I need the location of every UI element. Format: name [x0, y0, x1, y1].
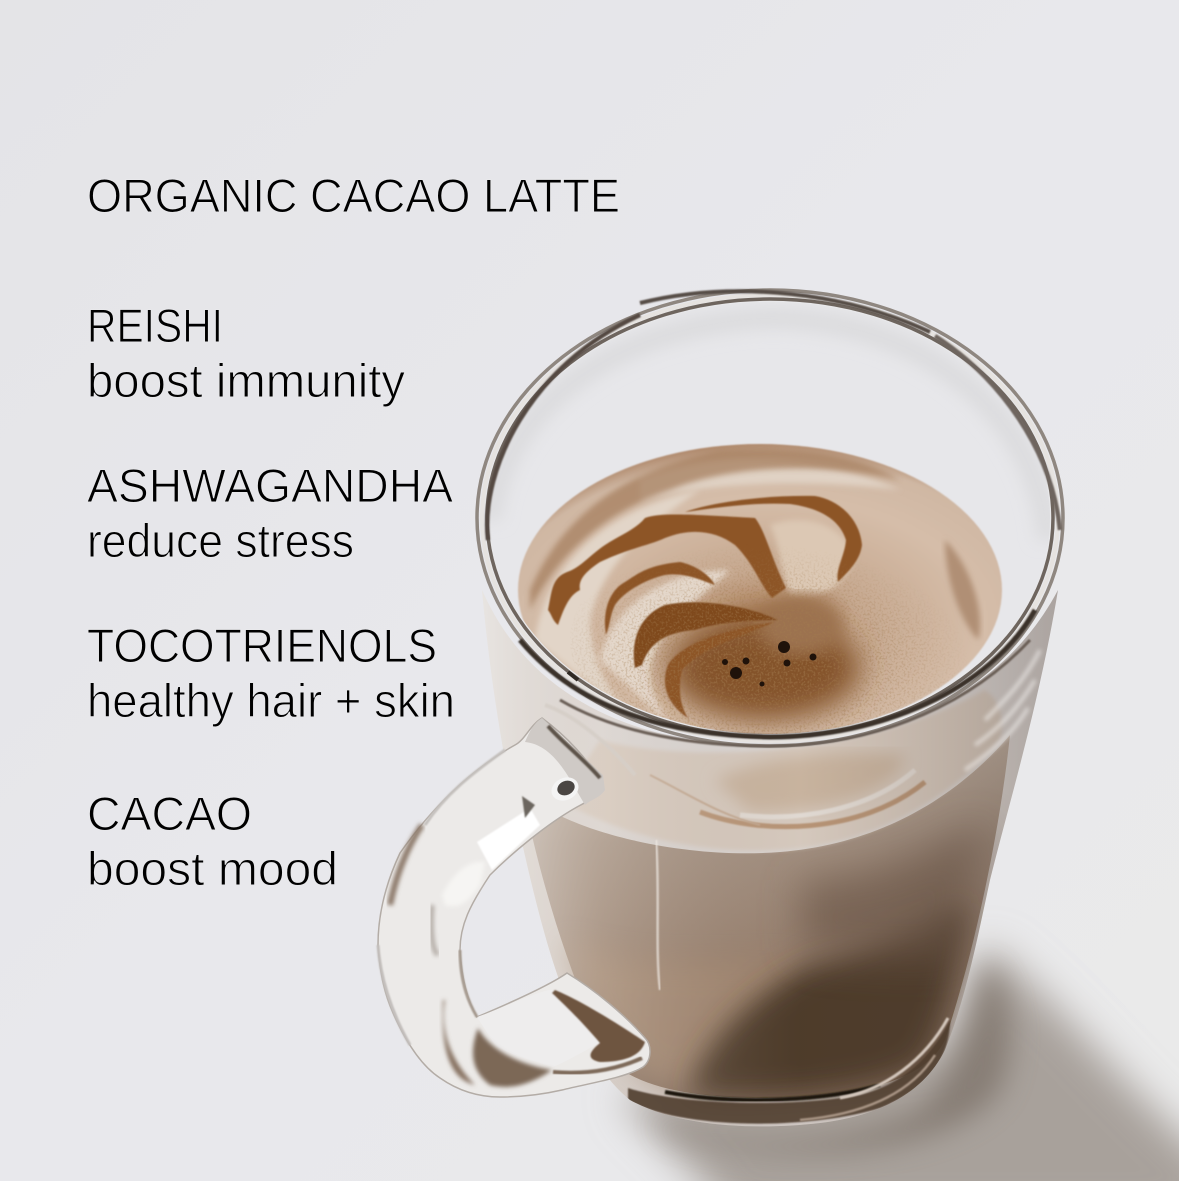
ingredient: reishi: boost immunity	[87, 354, 405, 407]
handle white highlight	[477, 808, 540, 870]
seam highlight	[656, 840, 660, 990]
dark lower liquid	[690, 900, 965, 1097]
back inner glass	[480, 290, 1070, 750]
brown reflection in handle base	[552, 990, 645, 1062]
rim dark accents	[487, 291, 1060, 746]
ingredient: ashwagandha: ASHWAGANDHA	[87, 459, 454, 512]
text list	[87, 169, 620, 895]
ingredient: reishi	[87, 299, 405, 407]
mug cast shadow	[620, 945, 1179, 1181]
handle	[378, 705, 650, 1097]
liquid	[522, 735, 1010, 1098]
thin upper arc	[685, 496, 862, 582]
ingredient: reishi: REISHI	[87, 299, 223, 352]
ingredient: ashwagandha: reduce stress	[87, 514, 354, 567]
coffee surface	[518, 444, 1002, 736]
handle smudges	[390, 825, 422, 905]
window under handle	[477, 990, 600, 1067]
upper brown edge band	[530, 449, 900, 610]
handle glass fill	[378, 718, 650, 1097]
pale foam patches	[534, 492, 696, 699]
glass mug	[378, 290, 1070, 1140]
ingredient: tocotrienols: healthy hair + skin	[87, 674, 455, 727]
lower inner arc	[665, 622, 775, 718]
glass rim	[477, 290, 1063, 746]
mug interior	[482, 294, 1058, 742]
lower wide arc	[634, 602, 778, 668]
handle joint	[525, 718, 605, 805]
ingredient: tocotrienols: TOCOTRIENOLS	[87, 619, 437, 672]
caramel swirl shapes	[548, 496, 862, 718]
ingredient: cacao: boost mood	[87, 842, 338, 895]
ingredient: tocotrienols	[87, 619, 455, 727]
mug body with liquid	[470, 580, 1070, 1140]
ingredient: ashwagandha	[87, 459, 454, 567]
mid arc	[605, 562, 715, 635]
title: ORGANIC CACAO LATTE	[87, 169, 620, 222]
infographic: cacao latte photo with ingredient list	[88, 180, 1179, 1181]
ingredient: cacao: CACAO	[87, 787, 252, 840]
thick glass base	[628, 1020, 950, 1124]
foam speckle texture	[570, 558, 945, 734]
dark centre foam	[670, 616, 860, 720]
horizontal glass ridges	[965, 650, 1040, 770]
body side tint	[470, 580, 1070, 1140]
ingredient: cacao	[87, 787, 338, 895]
bubbles	[722, 641, 816, 686]
warm tan band	[560, 946, 769, 1098]
foam wall	[560, 690, 1002, 851]
main swirl band	[548, 515, 786, 625]
